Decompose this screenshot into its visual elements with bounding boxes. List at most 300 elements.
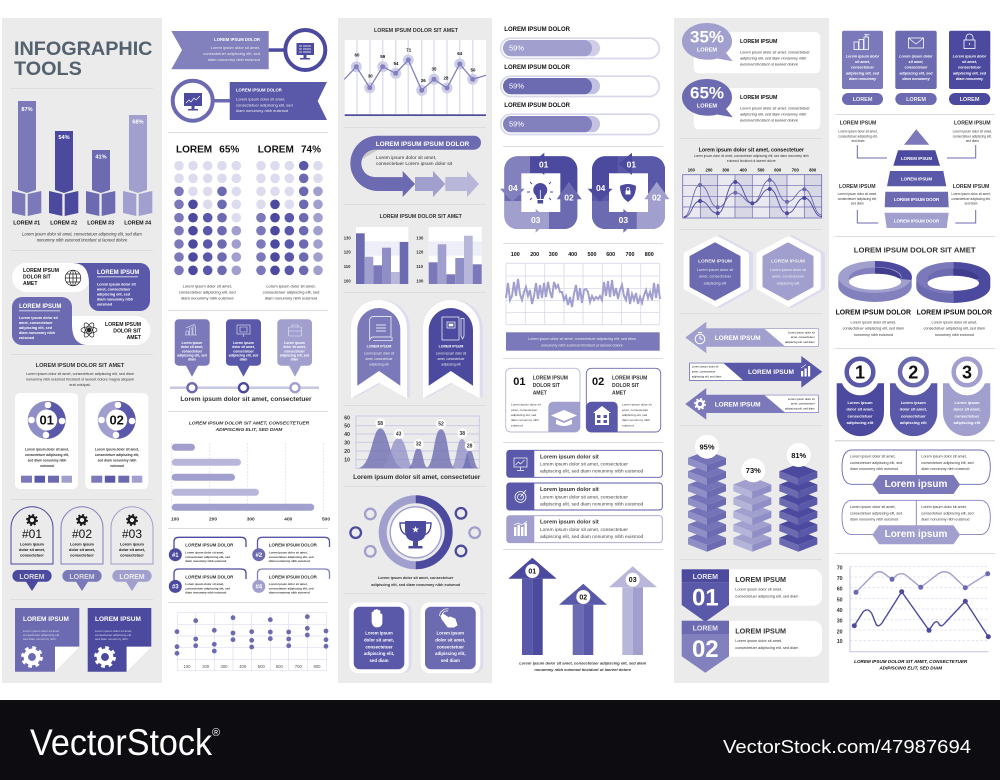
horizontal bar chart: 500 <box>322 516 330 522</box>
arch tag 03: LOREM <box>119 574 145 581</box>
icon card 3: diam nonummy <box>956 77 984 81</box>
icon: stopwatch <box>695 332 705 344</box>
timeline with callouts: Lorem ipsum <box>182 341 202 345</box>
arrow cycle: bulb: 02 <box>564 192 574 202</box>
number shield 3 <box>943 359 990 436</box>
tag item 3: Lorem ipsum dolor sit amet, <box>185 582 224 586</box>
split panel 1: consectetuer adipiscing elit, sed <box>921 461 974 465</box>
number shield 1: Lorem ipsum <box>847 400 873 405</box>
tag item 2: #2 <box>255 553 263 559</box>
number shield 2: adipiscing elit <box>900 420 927 425</box>
number shield 2: consectetuer <box>901 413 926 418</box>
left arrow banner 1: Lorem ipsum dolor sit <box>788 330 815 334</box>
dot matrix 65 percent: Lorem ipsum dolor sit amet, <box>183 284 232 288</box>
left arrow banner 2: amet, consectetuer <box>791 402 815 406</box>
pyramid diagram: consectetuer adipiscing elit, <box>838 134 878 138</box>
info card 02: euismod <box>622 424 634 428</box>
timeline with callouts: Lorem ipsum <box>284 341 305 345</box>
icon: graduation cap <box>551 410 577 426</box>
footer band <box>0 700 1000 780</box>
timeline with callouts <box>170 319 319 403</box>
noisy line chart: 700 <box>626 252 634 258</box>
arrow cycle: bulb <box>500 153 582 233</box>
area chart: 32 <box>416 442 422 448</box>
split panel 1: consectetuer adipiscing elit, sed <box>850 461 902 465</box>
speech card 35 percent: 35% <box>690 28 724 47</box>
noisy line chart: 400 <box>568 252 577 258</box>
scatter chart: 700 <box>295 664 302 669</box>
touch card 2: consectetuer <box>437 644 464 650</box>
3D ring left: Lorem ipsum dolor sit amet, <box>851 320 896 324</box>
wave chart: Lorem ipsum dolor sit amet, consectetuer <box>699 147 804 153</box>
ribbon banner 1 <box>171 30 325 70</box>
card 02: consectetuer adipiscing elit, <box>95 453 139 457</box>
progress bar 2: 59% <box>509 82 524 91</box>
pyramid diagram: sed diam <box>965 202 978 206</box>
dot matrix 65 percent: diam nonummy nibh euismod <box>181 296 233 300</box>
touch card 2: Lorem ipsum <box>437 630 464 636</box>
pill pair: globe: AMET <box>23 281 38 287</box>
right arrow banner: amet, consectetuer <box>692 370 716 374</box>
arch tag 03: #03 <box>122 527 142 541</box>
number shield 1: adipiscing elit <box>847 420 874 425</box>
brand wordmark: VectorStock <box>30 722 212 763</box>
up arrow 01: 01 <box>528 568 536 576</box>
paired column charts: 100 <box>416 279 424 284</box>
wave chart <box>683 147 822 218</box>
pyramid diagram: LOREM IPSUM <box>901 176 932 182</box>
area chart: 60 <box>344 416 350 422</box>
tag item 1: #1 <box>172 553 179 559</box>
icon: book <box>370 316 392 341</box>
dual line chart: ADIPISCING ELIT, SED DIAM <box>878 666 942 671</box>
pyramid diagram: LOREM IPSUM <box>953 184 989 190</box>
horizontal bar chart: LOREM IPSUM DOLOR SIT AMET, CONSECTETUER <box>189 420 310 426</box>
numbered tag 02: LOREM IPSUM <box>735 626 786 635</box>
number shield 2 <box>890 359 937 436</box>
pyramid diagram: LOREM IPSUM <box>901 156 932 161</box>
area chart: 50 <box>344 424 350 430</box>
arch tag 03 <box>111 507 153 591</box>
scatter chart: 600 <box>276 664 283 669</box>
pyramid diagram: consectetuer adipiscing elit, <box>951 197 991 201</box>
dot matrix 74 percent <box>256 145 323 300</box>
list row 1: adipiscing elit, sed diam nonummy nibh euismod <box>540 469 644 475</box>
speech card 65 percent: adipiscing elit, sed diam nonummy nibh <box>740 112 806 116</box>
touch card 2 <box>421 602 483 673</box>
left arrow banner 1: LOREM IPSUM <box>715 335 761 342</box>
speech card 35 percent: LOREM IPSUM <box>740 39 778 45</box>
progress bar 1: 59% <box>509 44 524 53</box>
trophy gauge: adipiscing elit, sed diam nonummy nibh euismod <box>371 583 461 587</box>
pyramid diagram: Lorem ipsum dolor sit amet, <box>953 130 992 134</box>
pill pair: globe: LOREM IPSUM <box>97 270 139 276</box>
sticky note 1: sed diam nonummy nibh. <box>23 637 57 641</box>
area chart: 52 <box>438 422 444 428</box>
pill pair: globe <box>12 263 150 311</box>
info card 01: Lorem ipsum dolor sit <box>511 402 541 406</box>
card 01: consectetuer adipiscing elit, <box>25 453 69 457</box>
icon card 1: Lorem ipsum dolor <box>846 54 880 58</box>
card 02: sed diam nonummy nibh <box>98 458 136 462</box>
area chart: 28 <box>467 444 473 450</box>
right arrow banner: Lorem ipsum dolor sit <box>692 364 719 368</box>
split panel 1: diam nonummy nibh euismod <box>850 467 898 471</box>
horizontal bar chart: 300 <box>247 516 255 522</box>
bar chart: percent columns: LOREM #3 <box>87 220 114 226</box>
3D ring right: nonummy nibh euismod <box>935 333 974 337</box>
up arrow 01 <box>508 558 557 655</box>
noisy line chart: 300 <box>549 252 558 258</box>
background panels <box>2 18 829 683</box>
icon: light bulb <box>527 182 553 204</box>
timeline with callouts: dolor sit amet, <box>232 345 255 349</box>
left arrow banner 1: adipiscing elit, sed diam <box>785 340 815 344</box>
ribbon banner 2: diam nonummy nibh euismod <box>236 108 288 113</box>
icon: notebook and pencil <box>442 317 464 340</box>
line chart: 28 <box>444 76 449 80</box>
ribbon banner 2: Lorem ipsum dolor sit amet, <box>236 96 285 102</box>
icon card 3: adipiscing elit, sed <box>953 71 987 75</box>
noisy line chart: 600 <box>606 252 615 258</box>
info card 02: Lorem ipsum dolor sit <box>622 402 652 406</box>
icon card 3: Lorem ipsum dolor <box>953 54 987 58</box>
list row 2: Lorem ipsum dolor sit <box>540 487 599 493</box>
paired column charts: 100 <box>344 279 351 284</box>
sticky note 2: consectetuer adipiscing elit, <box>95 633 132 637</box>
speech card 65 percent: 65% <box>690 84 724 103</box>
bar chart: percent columns: 68% <box>132 120 144 126</box>
list row 1: Lorem ipsum dolor sit amet, consectetuer <box>540 462 628 468</box>
trophy gauge: Lorem ipsum dolor sit amet, consectetuer <box>378 576 454 580</box>
tag item 3 <box>169 569 246 595</box>
right arrow banner: adipiscing elit, sed diam <box>692 374 722 378</box>
pyramid diagram: sed diam <box>966 139 979 143</box>
info card 02 <box>586 368 661 432</box>
timeline with callouts: diam <box>240 358 247 362</box>
scatter chart: 500 <box>258 664 265 669</box>
speech card 35 percent: adipiscing elit, sed diam nonummy nibh <box>740 56 806 60</box>
arch tag 01: dolor sit amet, <box>19 548 45 552</box>
timeline with callouts: diam <box>291 358 298 362</box>
progress bar 2 <box>501 65 659 96</box>
dot matrix 65 percent: LOREM <box>176 145 212 156</box>
3D ring left: LOREM IPSUM DOLOR <box>836 310 911 317</box>
info card 02: 02 <box>592 376 604 388</box>
speech card 65 percent: LOREM IPSUM <box>740 95 778 101</box>
hexagon 1 <box>686 237 751 306</box>
number shield 2: dolor sit amet, <box>900 407 927 412</box>
tag item 1: Lorem ipsum dolor sit amet, <box>185 550 224 554</box>
icon card 3: LOREM <box>960 97 980 103</box>
book ribbon 2: adipiscing elit <box>441 362 461 366</box>
icon card 3 <box>949 31 990 105</box>
line chart: 30 <box>368 74 373 78</box>
arrow cycle: bulb: 01 <box>539 160 549 170</box>
chart caption <box>22 232 142 242</box>
title: INFOGRAPHIC <box>14 38 152 60</box>
pill pair: atom: LOREM IPSUM <box>19 304 61 310</box>
pill pair: globe: amet, consectetuer <box>97 288 131 292</box>
U-turn arrow: LOREM IPSUM IPSUM DOLOR <box>376 141 470 148</box>
touch card 2: sed diam <box>441 658 460 663</box>
hand card 1: adipiscing elit, <box>364 651 394 656</box>
numbered tag 02: consectetuer adipiscing elit, sed diam <box>735 646 798 650</box>
card 01: Lorem ipsum dolor sit amet, <box>25 448 69 452</box>
tag item 3: diam nonummy nibh euismod <box>185 591 226 595</box>
area chart: 10 <box>344 458 350 464</box>
pyramid diagram: LOREM IPSUM DOOR <box>894 218 940 224</box>
timeline with callouts: Lorem ipsum dolor sit amet, consectetuer <box>180 396 312 403</box>
card 02: euismod <box>110 464 124 468</box>
image id: VectorStock.com/47987694 <box>723 737 971 757</box>
left arrow banner 2: LOREM IPSUM <box>715 402 761 408</box>
card 01: euismod <box>40 464 54 468</box>
wave chart: 500 <box>758 168 765 172</box>
pill pair: atom: DOLOR SIT <box>113 328 142 334</box>
timeline with callouts: consectetuer <box>182 349 203 353</box>
tag item 2: consectetuer adipiscing elit, sed <box>269 555 314 559</box>
3D ring left <box>836 261 912 337</box>
icon: atom <box>81 321 97 339</box>
info card 01: diam nonummy nibh <box>511 418 539 422</box>
split panel 2 <box>842 500 990 544</box>
tag item 4 <box>252 569 330 595</box>
pill pair: atom: amet, consectetuer <box>19 321 53 325</box>
ring heading: LOREM IPSUM DOLOR SIT AMET <box>854 246 976 254</box>
split panel 1: Lorem ipsum dolor sit amet, <box>850 455 896 459</box>
split panel 1 <box>842 450 990 494</box>
hexagon 2: LOREM IPSUM <box>771 258 805 264</box>
touch card 2: adipiscing elit, <box>435 651 466 656</box>
speech card 35 percent: LOREM <box>697 48 717 54</box>
timeline with callouts: consectetuer <box>284 349 305 353</box>
iso stack 95 percent <box>688 435 726 552</box>
info card 02: diam nonummy nibh <box>622 418 650 422</box>
speech card 35 percent <box>682 23 820 73</box>
timeline with callouts: Lorem ipsum <box>233 341 254 345</box>
tag item 4: consectetuer adipiscing elit, sed <box>269 587 314 591</box>
hexagon 1: amet, consectetuer <box>699 275 732 279</box>
ribbon banner 1: diam nonummy nibh euismod <box>208 57 260 62</box>
hexagon 2 <box>759 237 823 306</box>
icon: shield lock <box>620 184 636 202</box>
dual line chart: 60 <box>837 587 843 593</box>
section heading: nonummy nibh euismod tincidunt ut laoreet dolore magna aliquam <box>26 378 134 382</box>
left arrow banner 1: amet, consectetuer <box>791 335 815 339</box>
column 6 <box>835 31 995 671</box>
dual line chart: 30 <box>837 619 843 625</box>
horizontal bar chart <box>171 420 330 522</box>
left arrow banner 2: adipiscing elit, sed diam <box>785 406 815 410</box>
3D ring right: Lorem ipsum dolor sit amet, <box>932 320 977 324</box>
numbered tag 01: 01 <box>692 584 719 612</box>
column 2 <box>168 30 330 671</box>
arch tag 01: LOREM <box>19 574 45 581</box>
list row 2: adipiscing elit, sed diam nonummy nibh euismod <box>540 501 644 507</box>
dot matrix 74 percent: LOREM <box>258 145 294 156</box>
icon: rising bars <box>854 34 870 50</box>
card 02 <box>85 393 148 489</box>
noisy line chart: 200 <box>530 252 539 258</box>
noisy line chart: 100 <box>511 252 520 258</box>
section heading: LOREM IPSUM DOLOR SIT AMET <box>36 363 125 369</box>
timeline with callouts: dolor sit amet, <box>283 345 306 349</box>
list row 1 <box>507 450 662 477</box>
split panel 2: consectetuer adipiscing elit, sed <box>850 511 902 515</box>
dot matrix 65 percent: consectetuer adipiscing elit, sed <box>179 290 236 294</box>
numbered tag 01: LOREM <box>693 574 718 581</box>
icon card 2: sit amet, <box>909 60 923 64</box>
numbered tag 02 <box>682 621 822 673</box>
icon: monitor checklist <box>296 43 314 60</box>
number shield 2: 2 <box>908 362 918 382</box>
icon: open hand <box>372 610 382 627</box>
tag item 3: LOREM IPSUM DOLOR <box>185 574 234 579</box>
book ribbon 2 <box>423 300 483 398</box>
tag item 2: LOREM IPSUM DOLOR <box>269 543 318 548</box>
wave chart: euismod tincidunt ut laoreet dolore <box>727 159 776 163</box>
arch tag 03: consectetuer <box>120 554 144 558</box>
U-turn arrow <box>350 136 481 197</box>
arrow cycle: bulb: 03 <box>531 215 541 225</box>
bar chart: percent columns: LOREM #4 <box>124 220 151 226</box>
scatter chart: 300 <box>220 664 228 669</box>
iso stack 95 percent: 95% <box>699 442 715 452</box>
icon card 2 <box>895 31 937 105</box>
icon: presentation <box>237 325 250 337</box>
ribbon banner 2: consectetuer adipiscing elit, sed <box>236 102 293 108</box>
iso stack 73 percent: 73% <box>746 466 761 475</box>
area chart <box>344 416 481 481</box>
info card 02: AMET <box>612 391 626 397</box>
dot matrix 74 percent: diam nonummy nibh euismod <box>265 296 317 300</box>
ribbon banner 2: LOREM IPSUM DOLOR <box>236 88 282 93</box>
progress bar 3: 59% <box>509 120 524 129</box>
hexagon 2: adipiscing elit <box>777 281 800 285</box>
paired column charts: 120 <box>416 250 424 254</box>
number shield 3: adipiscing elit <box>954 420 981 425</box>
section heading <box>26 363 134 387</box>
line chart: 50 <box>471 68 476 72</box>
section heading: erat volutpat. <box>69 383 91 387</box>
horizontal bar chart: ADIPISCING ELIT, SED DIAM <box>215 427 283 433</box>
tag item 4: Lorem ipsum dolor sit amet, <box>269 582 308 586</box>
tag item 2 <box>252 537 330 563</box>
icon: padlock <box>964 34 975 48</box>
timeline with callouts: adipiscing elit, sed <box>280 353 309 357</box>
icon card 1 <box>842 31 883 105</box>
bar chart: percent columns <box>12 101 152 226</box>
paired column charts <box>344 214 482 284</box>
area chart: 20 <box>344 449 350 455</box>
speech card 35 percent: Lorem ipsum dolor sit amet, consectetuer <box>740 50 810 54</box>
numbered tag 02: 02 <box>692 636 719 663</box>
arrows caption <box>519 660 647 672</box>
chart caption: nonummy nibh euismod tincidunt ut laoreet dolore <box>37 238 128 242</box>
pyramid diagram: LOREM IPSUM <box>840 121 876 127</box>
bar chart: percent columns: LOREM #2 <box>50 220 77 226</box>
book ribbon 2: amet, consectetuer <box>437 357 465 361</box>
line chart: 71 <box>406 48 412 52</box>
scatter chart: 400 <box>239 664 247 669</box>
dual line chart: 20 <box>837 629 843 635</box>
icon card 2: adipiscing elit, sed <box>900 71 933 75</box>
caption banner: Lorem ipsum dolor sit amet, consectetuer adipiscing elit, sed diam <box>528 337 636 341</box>
paired column charts: 130 <box>416 235 424 240</box>
horizontal bar chart: 100 <box>171 516 179 522</box>
icon: bars <box>514 521 527 536</box>
arch tag 02: #02 <box>72 527 92 541</box>
pill pair: globe: adipiscing elit, sed <box>97 292 131 296</box>
arrow cycle: shield: 02 <box>652 192 662 202</box>
left arrow banner 2: Lorem ipsum dolor sit <box>788 397 815 401</box>
up arrow 03: 03 <box>629 577 637 584</box>
right arrow banner <box>689 356 822 388</box>
card 02: Lorem ipsum dolor sit amet, <box>95 448 139 452</box>
icon card 2: Lorem ipsum dolor <box>899 54 933 58</box>
iso stack 81 percent <box>779 443 817 552</box>
number shield 3: 3 <box>962 362 972 382</box>
iso stack 73 percent <box>733 458 771 552</box>
horizontal bar chart: 200 <box>209 516 217 522</box>
wave chart: 400 <box>740 168 747 172</box>
book ribbon 1 <box>351 300 410 398</box>
icon card 1: adipiscing elit, sed <box>846 71 880 75</box>
ribbon banner 1: consectetuer adipiscing elit, sed <box>203 51 260 56</box>
numbered tag 02: LOREM <box>693 625 718 632</box>
tag item 3: #3 <box>172 585 179 591</box>
ribbon banner 2 <box>173 81 327 121</box>
pyramid diagram: LOREM IPSUM <box>954 121 991 127</box>
pill pair: atom: AMET <box>127 335 142 341</box>
wave chart: 700 <box>792 168 799 172</box>
book ribbon 1: LOREM IPSUM <box>367 344 391 348</box>
numbered tag 01: LOREM IPSUM <box>735 575 786 584</box>
split panel 2: Lorem ipsum dolor sit amet, <box>850 505 896 509</box>
title: TOOLS <box>14 58 82 80</box>
sticky note 1 <box>15 608 79 672</box>
scatter chart: 100 <box>184 664 191 669</box>
number shield 1 <box>837 359 884 436</box>
list row 1: Lorem ipsum dolor sit <box>540 454 599 460</box>
bar chart: percent columns: LOREM #1 <box>13 220 40 226</box>
noisy line chart: 800 <box>645 252 654 258</box>
wave chart: 300 <box>722 168 730 172</box>
tag item 1: consectetuer adipiscing elit, sed <box>185 555 230 559</box>
split panel 2: consectetuer adipiscing elit, sed <box>921 511 974 515</box>
card 01: 01 <box>39 412 54 428</box>
pyramid diagram: Lorem ipsum dolor sit amet, <box>838 192 877 196</box>
split panel 1: Lorem ipsum dolor sit amet, <box>921 455 967 459</box>
icon card 1: LOREM <box>853 97 873 103</box>
book ribbon 1: Lorem ipsum dolor sit <box>364 352 394 356</box>
bar chart: percent columns: 41% <box>95 154 107 160</box>
timeline with callouts: diam <box>188 358 196 362</box>
card 01: sed diam nonummy nibh <box>28 458 66 462</box>
hand card 1: dolor sit amet, <box>364 638 394 642</box>
sticky note 2 <box>88 608 151 672</box>
book ribbon 1: adipiscing elit <box>369 362 389 366</box>
area chart: Lorem ipsum dolor sit amet, consectetuer <box>353 474 481 481</box>
numbered tag 02: Lorem ipsum dolor sit amet, <box>735 639 782 643</box>
pyramid diagram: sed diam <box>852 139 865 143</box>
timeline with callouts: consectetuer <box>233 349 254 353</box>
card 02: 02 <box>109 412 124 428</box>
pill pair: atom: euismod <box>19 336 35 340</box>
wave chart: 200 <box>706 168 713 172</box>
progress bar 1 <box>501 27 659 58</box>
